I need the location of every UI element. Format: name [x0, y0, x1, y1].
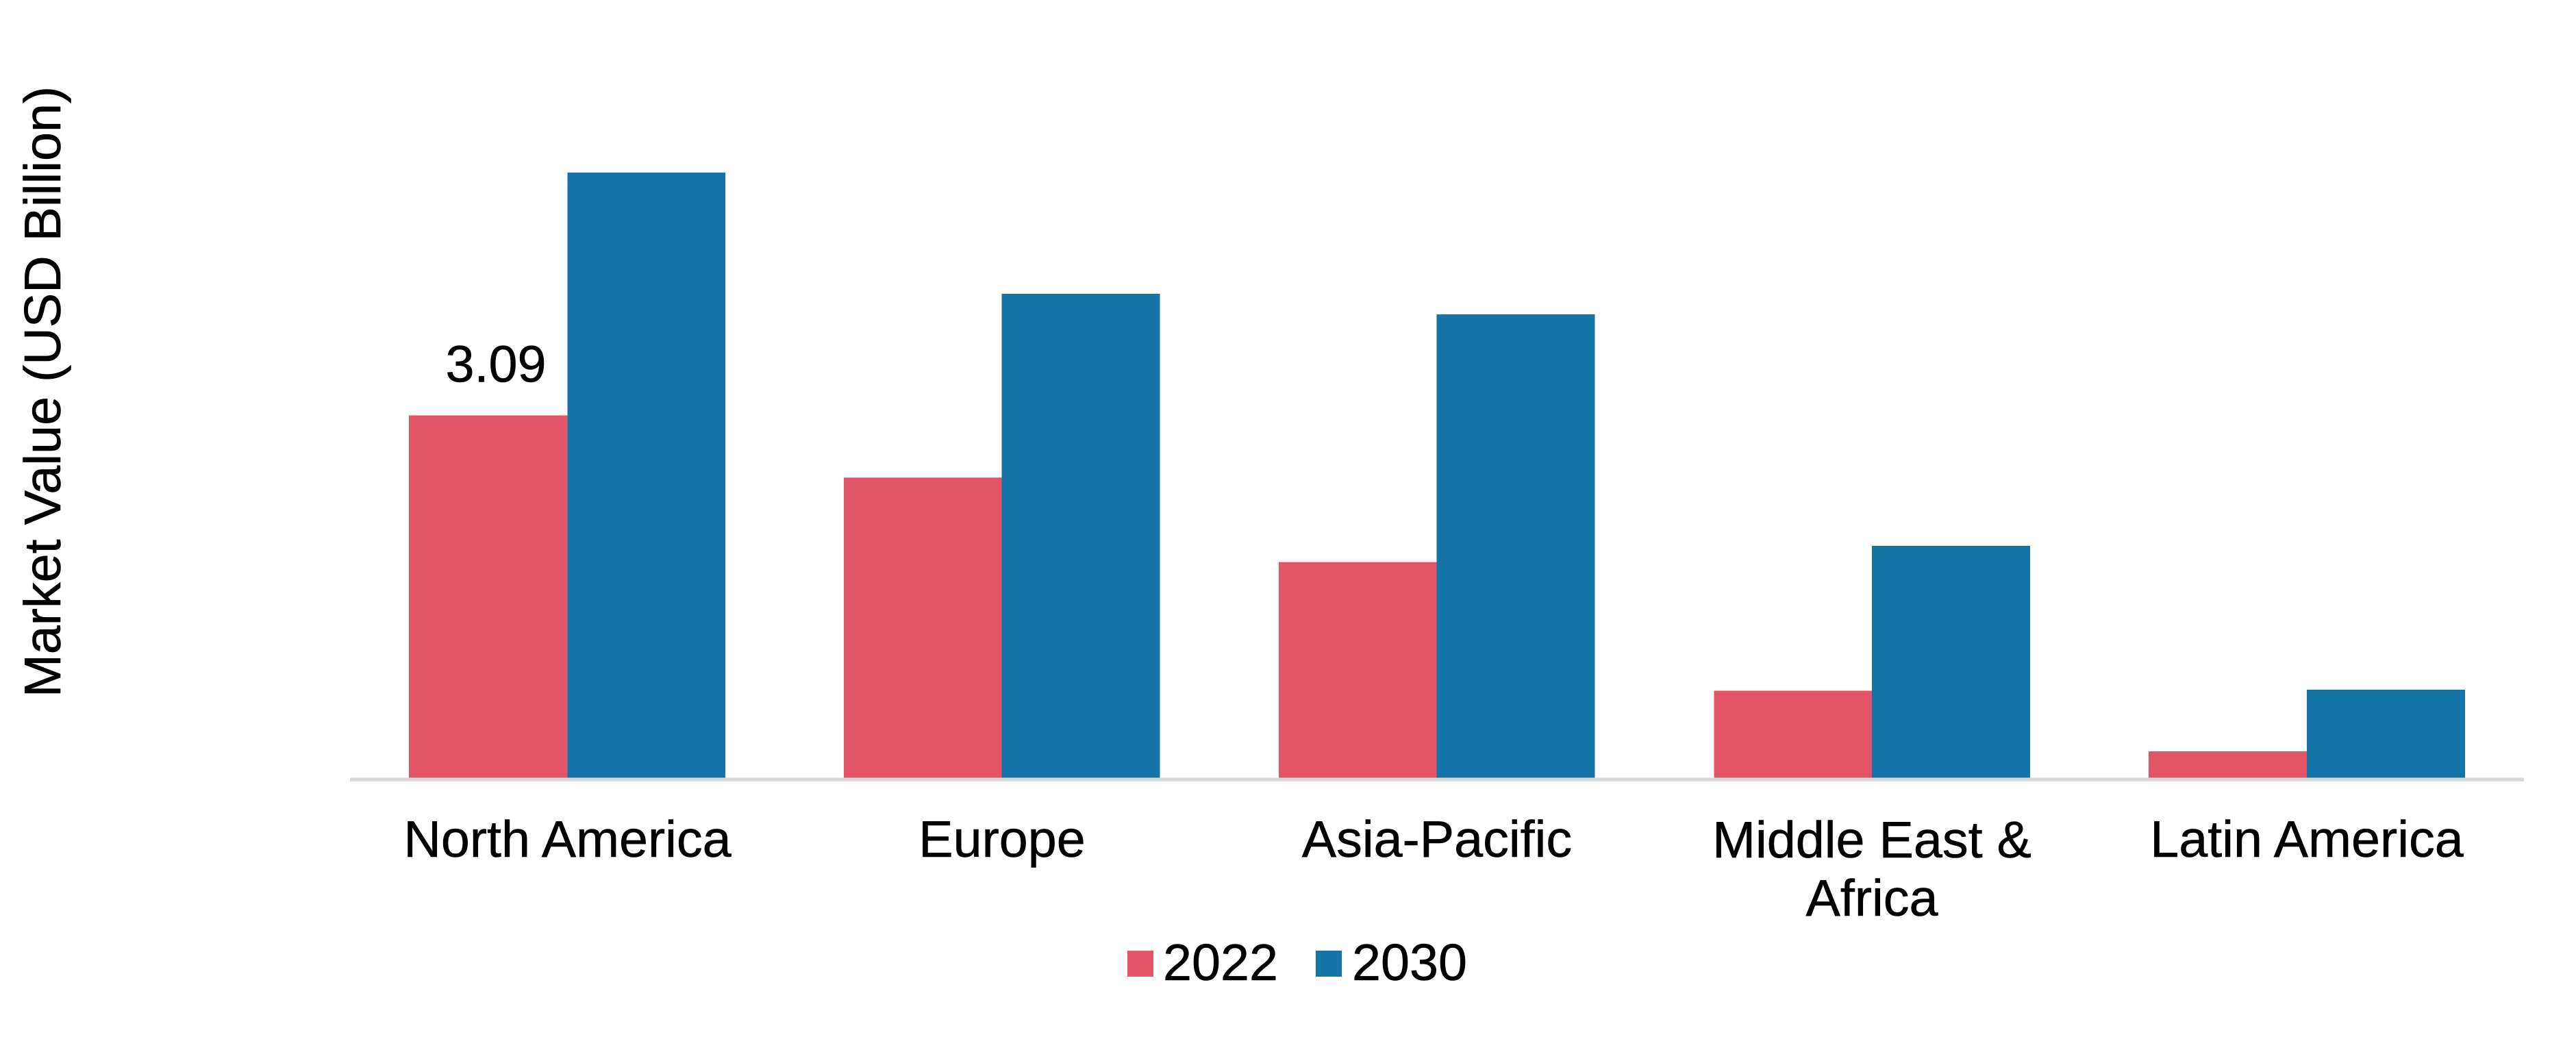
- category label: Latin America: Latin America: [2150, 810, 2464, 868]
- bar: Latin America 2030: [2307, 690, 2465, 778]
- y-axis title: Market Value (USD Billion): [14, 86, 71, 697]
- bar: Europe 2030: [1001, 294, 1160, 778]
- bars: Europe: [844, 294, 1160, 778]
- bars: North America: [409, 173, 725, 778]
- legend label: 2022: 2022: [1163, 934, 1278, 991]
- bars: Middle East & Africa: [1714, 546, 2030, 778]
- bar: Latin America 2022: [2149, 751, 2307, 778]
- bar: North America 2030: [567, 173, 725, 778]
- category label: Middle East & Africa: [1712, 811, 2031, 927]
- category label: North America: North America: [403, 810, 731, 868]
- category label: Middle East & Africa: Middle East &: [1712, 811, 2031, 868]
- legend label: 2030: 2030: [1352, 934, 1467, 991]
- bar: Middle East & Africa 2022: [1714, 690, 1872, 778]
- x-axis line: [350, 778, 2524, 781]
- bar: Middle East & Africa 2030: [1872, 546, 2030, 778]
- bar: Europe 2022: [844, 477, 1001, 778]
- category label: Asia-Pacific: Asia-Pacific: [1302, 810, 1572, 868]
- value label: North America 2022: 3.09: [446, 336, 546, 393]
- bar: Asia-Pacific 2022: [1279, 562, 1437, 778]
- bars: Latin America: [2149, 690, 2465, 778]
- bar: North America 2022: [409, 415, 567, 778]
- bars: Asia-Pacific: [1279, 314, 1595, 778]
- category label: Europe: Europe: [918, 810, 1086, 868]
- legend swatch: 2022: [1127, 951, 1153, 977]
- legend: [1127, 934, 1467, 991]
- bar: Asia-Pacific 2030: [1437, 314, 1595, 778]
- category label: Middle East & Africa: Africa: [1805, 869, 1938, 927]
- legend swatch: 2030: [1316, 951, 1342, 977]
